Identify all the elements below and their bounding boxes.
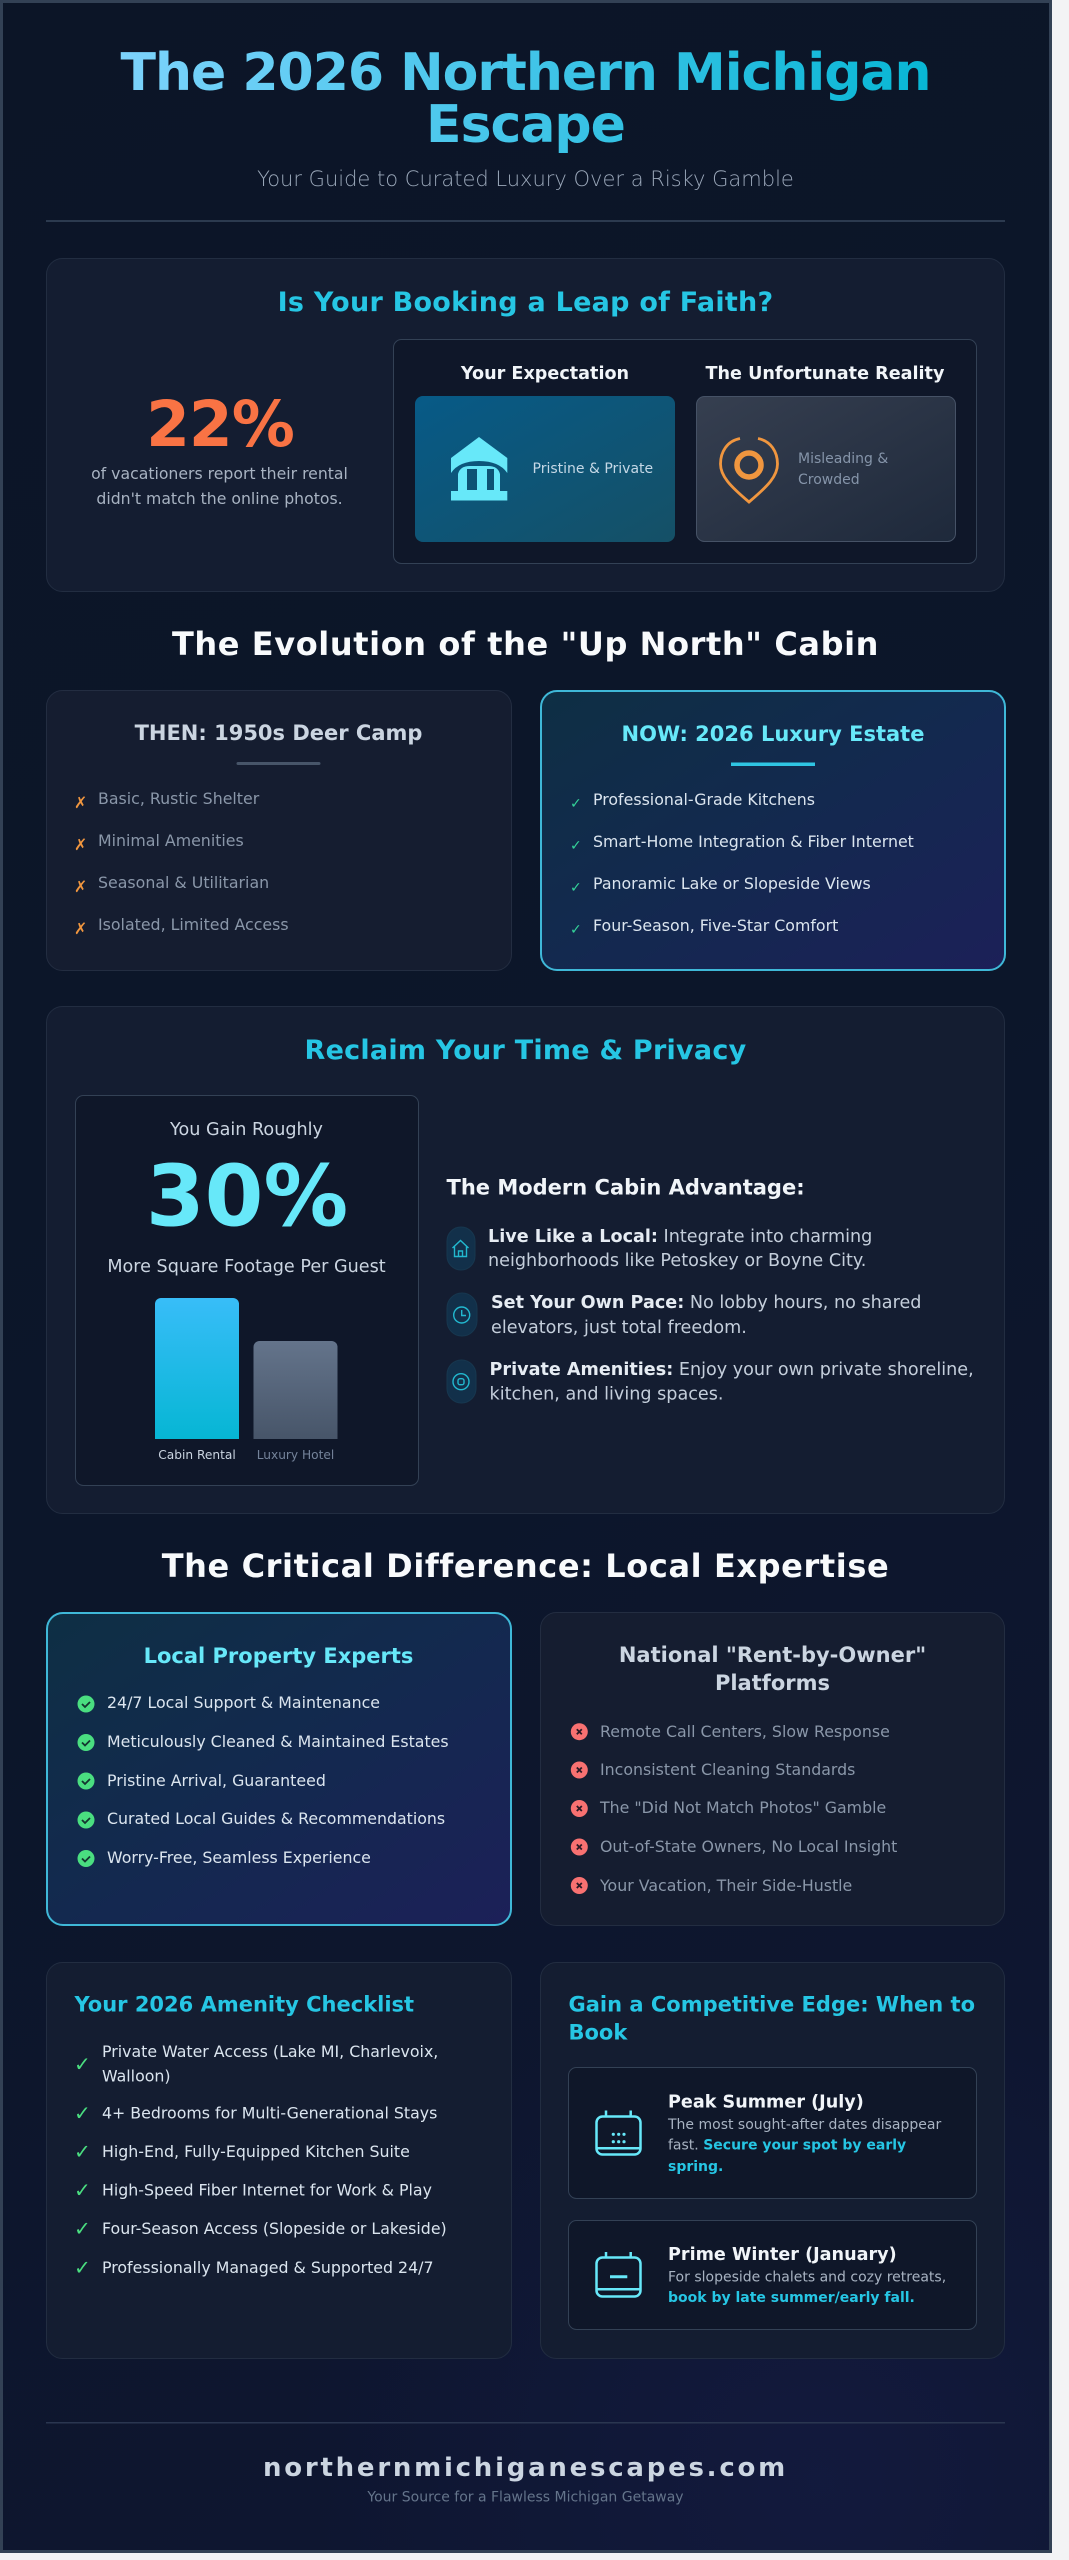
card text: peak summer: spring. (668, 2159, 723, 2175)
stat label bottom: More Square Footage Per Guest (107, 1257, 386, 1277)
heading: when to book (568, 1992, 975, 2044)
stat description (91, 464, 348, 508)
list: national platforms: Remote Call Centers, Slow Response (600, 1722, 890, 1741)
list: amenities: 4+ Bedrooms for Multi-Generational Stays (102, 2104, 437, 2122)
list: then: Minimal Amenities (98, 831, 244, 850)
card: prime winter (568, 2220, 976, 2330)
icon: classical building home (451, 437, 507, 500)
list: then: ✗ (74, 919, 87, 938)
footer (263, 2453, 788, 2506)
advantage heading: The Modern Cabin Advantage: (446, 1176, 805, 1200)
list: now: Four-Season, Five-Star Comfort (593, 916, 838, 935)
footer: website: northernmichiganescapes.com (263, 2453, 788, 2483)
title: Escape (426, 95, 625, 155)
list: then: ✗ (74, 835, 87, 854)
list: local experts: Pristine Arrival, Guaranteed (107, 1771, 326, 1790)
advantage: set your own pace: elevators, just total freedom. (491, 1318, 747, 1338)
panel: local property experts (47, 1613, 511, 1925)
advantage: live like a local (447, 1227, 872, 1271)
heading: reclaim: Reclaim Your Time & Privacy (305, 1035, 747, 1066)
stat card: 30% (76, 1096, 418, 1486)
title (120, 43, 931, 155)
list: national platforms: Your Vacation, Their Side-Hustle (599, 1876, 852, 1895)
heading: national platforms (619, 1643, 926, 1695)
list: then: ✗ (74, 877, 87, 896)
card title: prime winter: Prime Winter (January) (668, 2245, 897, 2265)
stat: 30%: 30% (146, 1148, 348, 1246)
advantage: private amenities: Private Amenities: Enjoy your own private shoreline, (490, 1360, 974, 1380)
list: national platforms: Out-of-State Owners, No Local Insight (600, 1837, 897, 1856)
panel: amenity checklist (46, 1962, 512, 2358)
heading: when to book: Gain a Competitive Edge: When to (568, 1992, 975, 2016)
heading: then: THEN: 1950s Deer Camp (135, 721, 422, 745)
card text: peak summer (667, 2117, 941, 2175)
advantage: live like a local: neighborhoods like Petoskey or Boyne City. (488, 1251, 866, 1271)
panel: national platforms (540, 1612, 1004, 1926)
list: now (570, 790, 914, 938)
panel: then (46, 690, 512, 970)
bar chart (155, 1298, 338, 1462)
list: then: Isolated, Limited Access (98, 915, 289, 934)
icon: calendar dash (596, 2252, 640, 2296)
heading: local experts: Local Property Experts (144, 1644, 413, 1668)
list: amenities: ✓ (74, 2052, 91, 2076)
card text: prime winter (668, 2270, 946, 2306)
list: amenities: Professionally Managed & Supported 24/7 (102, 2258, 434, 2277)
label: unfortunate reality: The Unfortunate Reality (706, 364, 945, 384)
stat label top: You Gain Roughly (169, 1120, 323, 1140)
tile: reality (696, 396, 956, 542)
section heading: local expertise: The Critical Difference: Local Expertise (162, 1547, 889, 1585)
list: now: Panoramic Lake or Slopeside Views (593, 874, 871, 893)
list: amenities: Four-Season Access (Slopeside or Lakeside) (102, 2219, 447, 2238)
list: now: Professional-Grade Kitchens (593, 790, 815, 809)
icon: map pin (720, 438, 778, 502)
list: local experts: Curated Local Guides & Recommendations (107, 1809, 445, 1828)
heading: national platforms: National "Rent-by-Owner" (619, 1643, 926, 1667)
list: now: ✓ (570, 880, 582, 896)
advantage: set your own pace (447, 1293, 921, 1338)
list: then: Seasonal & Utilitarian (98, 873, 269, 892)
list: local experts: Meticulously Cleaned & Maintained Estates (107, 1732, 449, 1751)
list: national platforms: The "Did Not Match Photos" Gamble (599, 1798, 886, 1817)
list: amenities (74, 2042, 447, 2280)
list: amenities: Private Water Access (Lake MI, Charlevoix, (102, 2042, 438, 2061)
icon: house (447, 1227, 475, 1270)
bar: cabin rental (155, 1298, 239, 1439)
label: your expectation: Your Expectation (460, 364, 629, 384)
header (46, 43, 1005, 222)
tile label: misleading: Misleading & (798, 451, 888, 467)
card text: peak summer: fast. Secure your spot by early (668, 2138, 906, 2154)
heading: now: NOW: 2026 Luxury Estate (622, 722, 924, 746)
footer: tagline: Your Source for a Flawless Michigan Getaway (366, 2490, 684, 2506)
list: then: ✗ (74, 793, 87, 812)
list: amenities: ✓ (74, 2178, 91, 2202)
list: amenities: ✓ (74, 2216, 91, 2240)
tile label: pristine: Pristine & Private (532, 461, 653, 477)
list: now: ✓ (570, 922, 582, 938)
list: now: Smart-Home Integration & Fiber Internet (593, 832, 914, 851)
list: amenities: ✓ (74, 2256, 91, 2280)
list: local experts: Worry-Free, Seamless Experience (107, 1848, 371, 1867)
icon: target (447, 1360, 476, 1403)
advantage: private amenities (447, 1360, 974, 1404)
list: now: ✓ (570, 796, 582, 812)
section heading: evolution: The Evolution of the "Up North" Cabin (172, 625, 879, 663)
bar label: cabin rental: Cabin Rental (158, 1448, 236, 1462)
card title: peak summer: Peak Summer (July) (668, 2093, 864, 2113)
panel: when to book (540, 1962, 1004, 2358)
panel: reclaim time and privacy (46, 1006, 1004, 1514)
list: amenities: High-Speed Fiber Internet for Work & Play (102, 2180, 432, 2200)
advantage: private amenities: kitchen, and living spaces. (490, 1384, 724, 1404)
list: then (74, 789, 289, 938)
list: national platforms: Inconsistent Cleaning Standards (600, 1760, 855, 1779)
stat description: of vacationers report their rental (91, 464, 348, 483)
bar: luxury hotel (254, 1341, 338, 1439)
heading: leap of faith: Is Your Booking a Leap of Faith? (278, 287, 773, 318)
panel: now (541, 691, 1005, 970)
stat description: didn't match the online photos. (96, 489, 343, 508)
list: then: Basic, Rustic Shelter (98, 789, 260, 808)
tile: expectation (415, 396, 675, 542)
tile label: misleading (798, 451, 888, 488)
list: national platforms (571, 1722, 897, 1895)
list: amenities: ✓ (74, 2140, 91, 2164)
tile label: misleading: Crowded (798, 472, 860, 488)
bar label: luxury hotel: Luxury Hotel (257, 1448, 334, 1462)
heading: when to book: Book (568, 2020, 628, 2044)
list: now: ✓ (570, 838, 582, 854)
list: local experts (78, 1693, 449, 1867)
icon: clock (447, 1293, 477, 1336)
title: The 2026 Northern Michigan (120, 43, 931, 103)
list: amenities: High-End, Fully-Equipped Kitchen Suite (102, 2142, 410, 2161)
stat: 22%: 22% (146, 388, 294, 461)
panel: leap of faith (46, 258, 1004, 592)
comparison box (394, 340, 976, 564)
list: local experts: 24/7 Local Support & Maintenance (107, 1693, 380, 1712)
subtitle: Your Guide to Curated Luxury Over a Risky Gamble (257, 167, 794, 191)
heading: national platforms: Platforms (715, 1671, 830, 1695)
advantage: set your own pace: Set Your Own Pace: No lobby hours, no shared (491, 1293, 921, 1313)
card text: prime winter: book by late summer/early fall. (668, 2290, 915, 2306)
card text: peak summer: The most sought-after dates disappear (667, 2117, 941, 2133)
icon: calendar dots (596, 2110, 640, 2154)
heading: amenity checklist: Your 2026 Amenity Checklist (74, 1992, 414, 2016)
list: amenities: ✓ (74, 2101, 91, 2125)
card text: prime winter: For slopeside chalets and cozy retreats, (668, 2270, 946, 2286)
list: amenities: Walloon) (102, 2066, 171, 2086)
advantage: live like a local: Live Like a Local: Integrate into charming (488, 1227, 872, 1247)
card: peak summer (568, 2068, 976, 2198)
